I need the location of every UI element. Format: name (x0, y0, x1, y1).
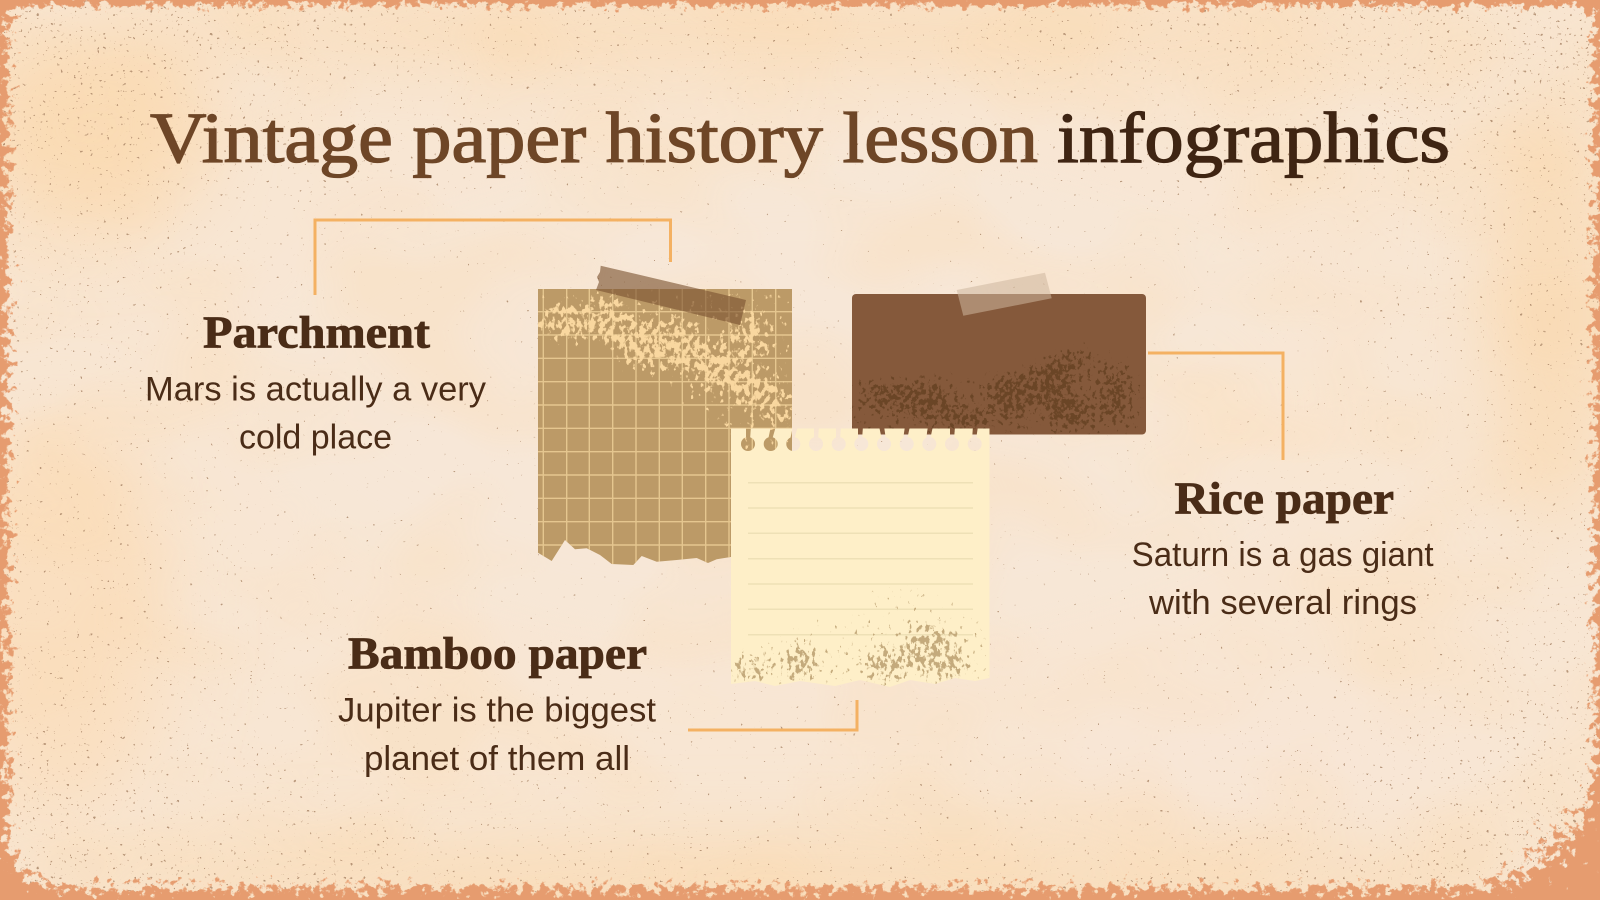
text block: rice paper (1132, 472, 1434, 622)
text block: rice paper: Saturn is a gas giant (1132, 536, 1434, 574)
text block: rice paper: Rice paper (1174, 472, 1394, 524)
title (150, 98, 1450, 178)
panel: rice paper (852, 272, 1146, 434)
title: Vintage paper history lesson (150, 98, 1038, 178)
text block: parchment: Mars is actually a very (145, 371, 486, 409)
panel: parchment paper (538, 266, 792, 565)
connector: bamboo paper (688, 700, 857, 730)
text block: parchment (145, 306, 486, 456)
text block: bamboo paper: Bamboo paper (348, 628, 647, 678)
panel: bamboo paper note (731, 428, 990, 687)
text block: bamboo paper (338, 628, 657, 778)
connector: parchment (315, 220, 670, 295)
text block: parchment: cold place (239, 418, 392, 456)
connector: rice paper (1148, 353, 1283, 460)
text block: rice paper: with several rings (1148, 584, 1417, 622)
tape: torn brown strip (596, 266, 746, 325)
tape: translucent strip (957, 273, 1052, 316)
text block: bamboo paper: planet of them all (364, 740, 630, 778)
text block: parchment: Parchment (203, 306, 431, 358)
text block: bamboo paper: Jupiter is the biggest (338, 692, 657, 730)
title: infographics (1057, 98, 1450, 178)
